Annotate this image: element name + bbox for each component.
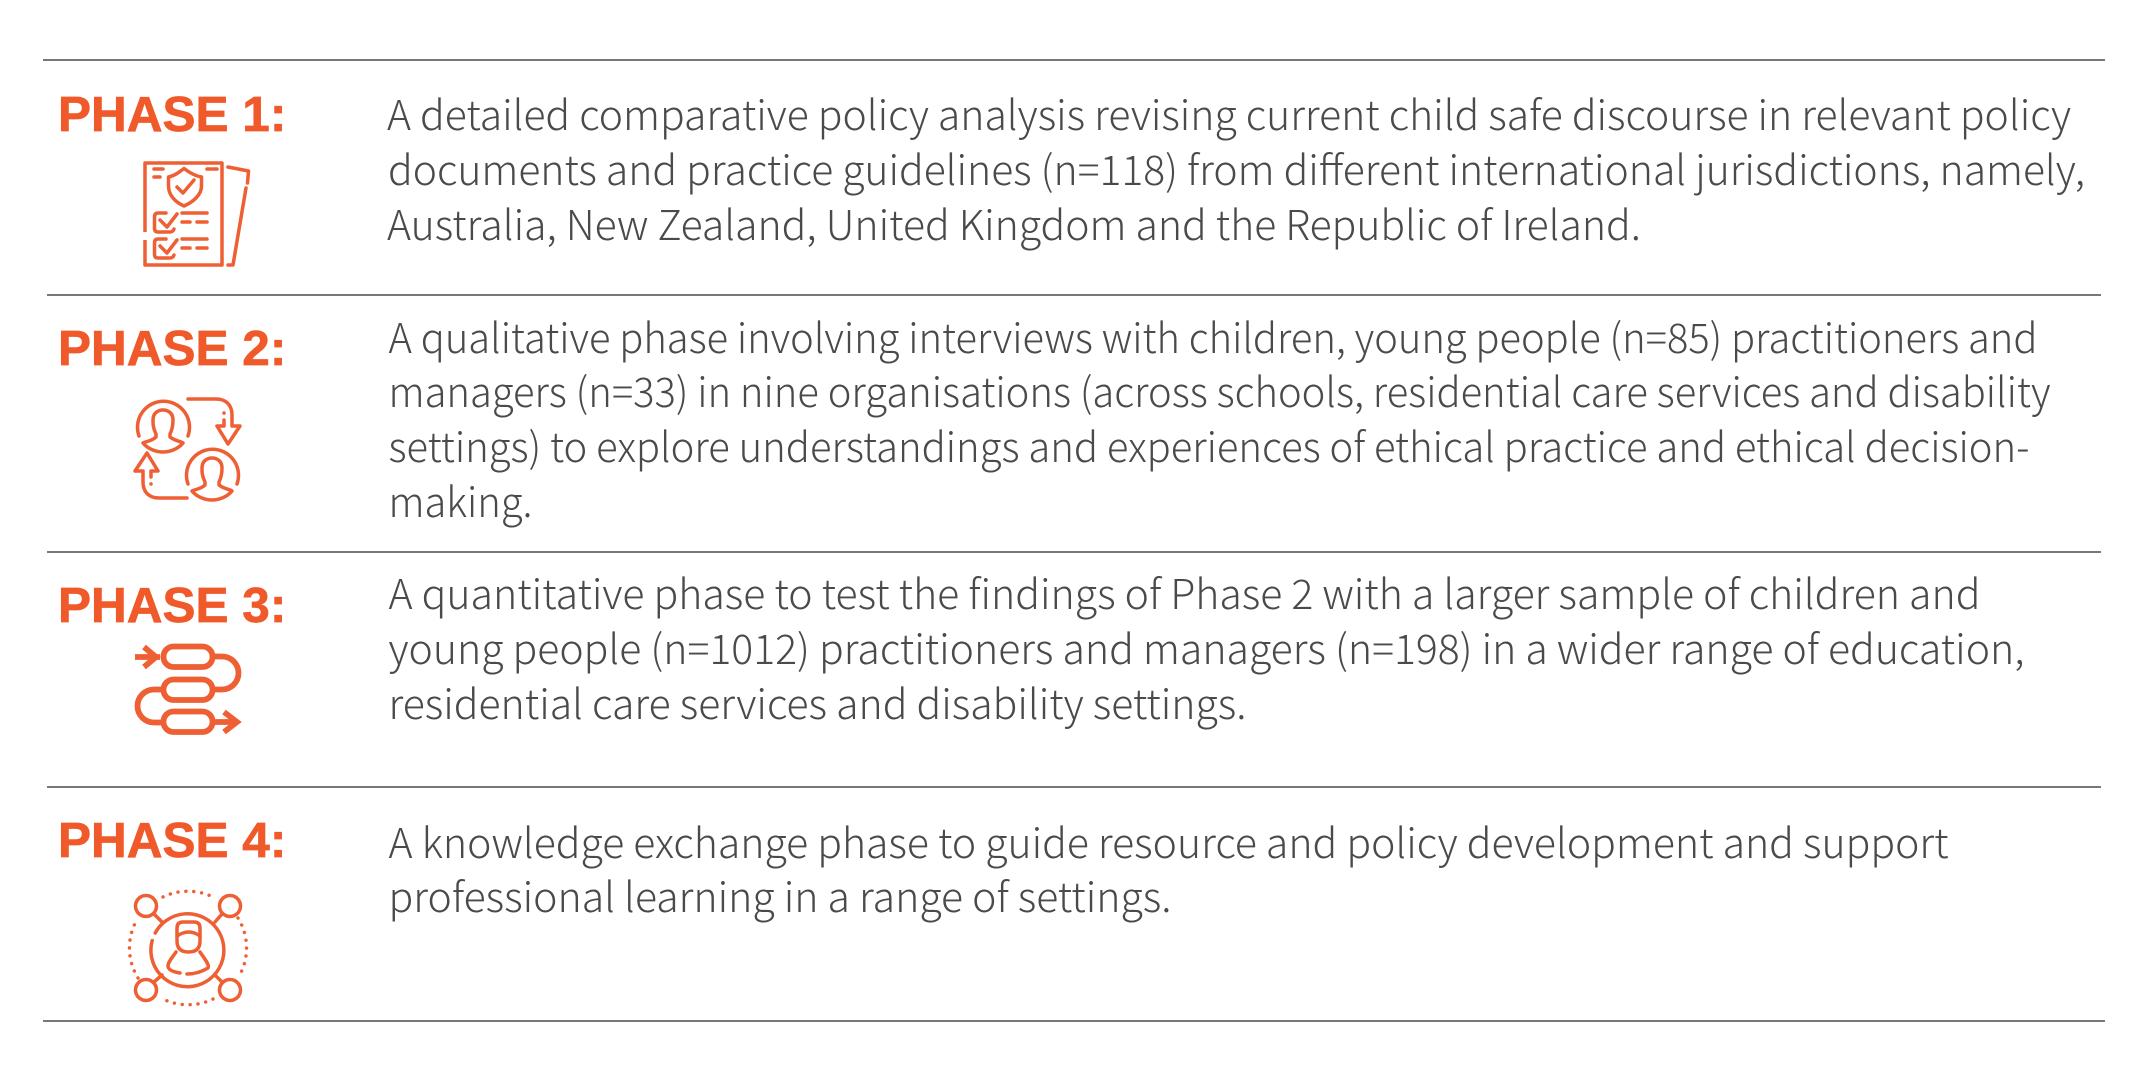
panel: phase 3 [58,561,2024,732]
text block: phase 1 description: Australia, New Zealand, United Kingdom and the Republic of Ireland. [387,192,1641,252]
text block: phase 2 description: settings) to explore understandings and experiences of ethical practice and ethical decision- [388,414,2030,474]
panel: phase 1 [58,82,2085,265]
text block: phase 1 description: documents and practice guidelines (n=118) from different international jurisdictions, namely, [388,137,2085,197]
text block: phase 2 description [388,305,2050,529]
text block: phase 3 description: A quantitative phase to test the findings of Phase 2 with a larger sample of children and [388,561,1980,621]
text block: phase 1 description [387,82,2085,252]
heading: phase 1: PHASE 1: [58,87,286,142]
heading: phase 2: PHASE 2: [58,321,286,376]
icon: two people exchanging with cycle arrows [135,399,240,500]
panel: phase 2 [58,305,2050,529]
text block: phase 2 description: making. [388,469,532,529]
text block: phase 3 description: young people (n=1012) practitioners and managers (n=198) in a wider range of education, [388,616,2024,676]
icon: policy document checklist with shield [145,163,248,265]
text block: phase 4 description: professional learning in a range of settings. [388,864,1172,924]
text block: phase 4 description [388,810,1948,924]
text block: phase 3 description [388,561,2024,731]
text block: phase 2 description: A qualitative phase involving interviews with children, young people (n=85) practitioners and [388,305,2038,365]
heading: phase 4: PHASE 4: [58,813,286,868]
text block: phase 1 description: A detailed comparative policy analysis revising current child safe discourse in relevant policy [387,82,2071,142]
text block: phase 3 description: residential care services and disability settings. [388,671,1246,731]
heading: phase 3: PHASE 3: [58,578,286,633]
text block: phase 2 description: managers (n=33) in nine organisations (across schools, residential care services and disability [388,359,2050,419]
icon: person at the centre of a connected network [129,891,247,1005]
panel: phase 4 [58,810,1948,1005]
text block: phase 4 description: A knowledge exchange phase to guide resource and policy development and support [388,810,1948,870]
icon: serpentine process flow [135,646,239,732]
